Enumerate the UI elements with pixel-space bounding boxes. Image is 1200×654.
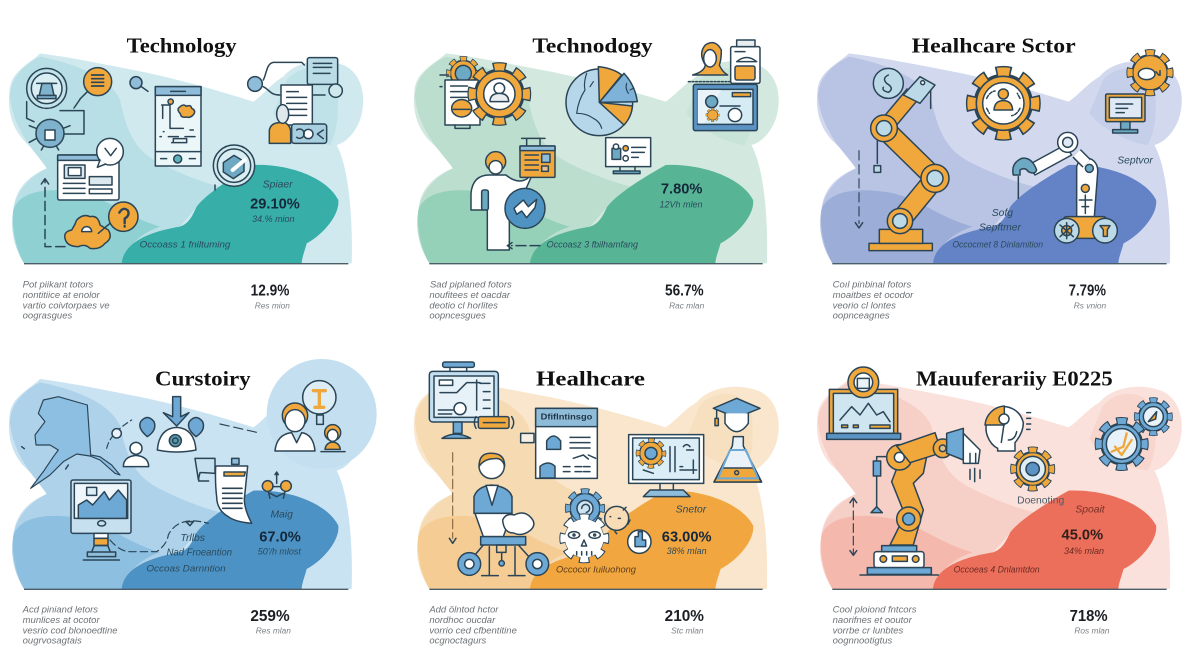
stat callout: Trllbs bbox=[180, 533, 205, 544]
body text bbox=[428, 605, 517, 646]
stat callout: Doenoting bbox=[1017, 495, 1064, 506]
body text: oopnceagnes bbox=[833, 311, 890, 322]
divider bbox=[429, 587, 763, 591]
arrow: dashed down bbox=[449, 453, 456, 543]
body text: Acd piniand letors bbox=[22, 605, 98, 616]
stat callout: Spiaer bbox=[263, 179, 293, 190]
body text: moaitbes et ocodor bbox=[833, 290, 914, 301]
bottom stat bbox=[251, 282, 290, 311]
background blobs bbox=[817, 53, 1182, 263]
icon: white robot arm bbox=[1013, 132, 1117, 243]
icon: dashed link with people bbox=[107, 420, 257, 467]
bottom stat: 12.9% bbox=[251, 282, 290, 299]
body text: vartio coivtorpaes ve bbox=[23, 300, 110, 311]
icon: magnifier bbox=[130, 77, 148, 91]
icon: businessman on wheeled chair bbox=[458, 453, 549, 576]
body text: nontitiice at enolor bbox=[23, 290, 100, 301]
stat callout: Occoeas 4 Dnlamtdon bbox=[954, 565, 1040, 575]
panel: Healhcare Sctor (indigo) bbox=[817, 33, 1182, 322]
stat callout: Spoait bbox=[1075, 504, 1106, 515]
stat callout: Occoasz 3 fbilhamfang bbox=[547, 240, 638, 250]
icon: browser window with bubble bbox=[58, 138, 123, 200]
divider bbox=[429, 262, 763, 266]
body text bbox=[22, 605, 118, 646]
bottom stat: 718% bbox=[1070, 608, 1108, 625]
stat callout: 67.0% bbox=[259, 530, 301, 546]
body text: deotio cl horlites bbox=[429, 300, 498, 311]
arrow: dashed up bbox=[41, 179, 65, 247]
stat callout: Nad Froeantion bbox=[167, 548, 232, 559]
icon: phone with circuit bbox=[155, 87, 201, 166]
icon: head profile bbox=[985, 406, 1031, 451]
icon: center gear bbox=[1014, 450, 1052, 488]
icon: robot dial bbox=[27, 68, 67, 122]
body text: vorrbe cr lunbtes bbox=[833, 625, 904, 636]
icon: person with idea bbox=[275, 381, 345, 452]
body text: vorrio ced cfbentitine bbox=[429, 625, 517, 636]
bottom stat bbox=[1069, 282, 1107, 311]
background blobs bbox=[817, 379, 1182, 589]
title: Technodogy bbox=[532, 33, 653, 57]
background blobs bbox=[9, 379, 363, 589]
icon: person gear bbox=[972, 72, 1035, 135]
icon: gears with document bbox=[440, 59, 526, 128]
body text: oograsgues bbox=[23, 311, 72, 322]
body text: ocgnoctagurs bbox=[429, 635, 487, 646]
body text bbox=[23, 280, 110, 322]
panel: Healhcare (orange) bbox=[414, 362, 779, 646]
stat callout: 63.00% bbox=[662, 529, 712, 545]
body text: vesrio cod blonoedtine bbox=[23, 625, 118, 636]
icon: large robot arm bbox=[869, 68, 949, 251]
stat callout: 12Vh mlen bbox=[660, 199, 702, 209]
background blobs bbox=[9, 53, 363, 263]
icon: woman, jar and tablet bbox=[688, 40, 760, 131]
background blobs bbox=[414, 53, 779, 263]
body text: noufitees et oacdar bbox=[429, 290, 511, 301]
bottom stat: Ros mlan bbox=[1074, 626, 1110, 636]
icon: documents and person bbox=[248, 58, 342, 143]
icon: blue gears bbox=[1099, 400, 1170, 467]
icon: graduate with flask bbox=[713, 398, 762, 482]
icon: gear and monitor bbox=[1106, 53, 1170, 133]
title: Curstoiry bbox=[155, 367, 251, 391]
body text bbox=[833, 280, 914, 322]
title: Healhcare Sctor bbox=[912, 33, 1076, 57]
icon: eye with arrows bbox=[140, 397, 203, 452]
stat callout bbox=[140, 179, 300, 249]
icon: cog skull bbox=[563, 491, 651, 559]
stat callout bbox=[556, 504, 712, 575]
stat callout: 7.80% bbox=[661, 181, 702, 197]
bottom stat bbox=[1070, 608, 1110, 636]
stat labels bbox=[952, 155, 1153, 250]
panel: Technology (teal) bbox=[9, 33, 363, 322]
stat callout: 34.% mion bbox=[252, 214, 295, 224]
icon: kiosk display bbox=[429, 362, 514, 438]
panel: Technology (green) bbox=[414, 33, 779, 322]
bottom stat bbox=[665, 608, 704, 636]
icon: orange chat bubble bbox=[74, 68, 112, 108]
icon: robot arm with nozzle bbox=[860, 428, 980, 575]
icon: computer with gear bbox=[629, 435, 704, 497]
stat callout: 45.0% bbox=[1062, 528, 1103, 544]
body text: munlices at ocotor bbox=[23, 615, 100, 626]
body text bbox=[429, 280, 512, 322]
body text: Coıl pinbinal fotors bbox=[833, 280, 911, 291]
icon: bug circle with connector bbox=[29, 111, 84, 150]
body text bbox=[833, 605, 917, 646]
arrow: dashed down bbox=[855, 151, 863, 228]
stat callout: 50'/h mlost bbox=[258, 546, 301, 556]
divider bbox=[24, 262, 348, 266]
icon: info card: Dfiflntinsgo bbox=[541, 411, 592, 421]
bottom stat: 259% bbox=[250, 608, 290, 625]
bottom stat: 7.79% bbox=[1069, 282, 1106, 299]
icon: monitor bbox=[606, 138, 651, 174]
divider bbox=[24, 587, 348, 591]
body text: naorifnes et ooutor bbox=[833, 615, 913, 626]
body text: nordhoc oucdar bbox=[429, 615, 496, 626]
icon: info card bbox=[521, 408, 597, 478]
stat callout: Occoass 1 fniltuming bbox=[140, 239, 230, 249]
title: Healhcare bbox=[536, 367, 645, 391]
body text: Add ölntod hctor bbox=[428, 605, 499, 616]
panel: Mauuferariiy E0225 (coral) bbox=[817, 367, 1182, 646]
body text: ougrvosagtais bbox=[23, 635, 82, 646]
background: person circle bbox=[267, 359, 377, 469]
stat labels: Sofg bbox=[992, 208, 1013, 219]
title: Technology bbox=[127, 33, 237, 57]
stat callout: Occocor Iuiluohong bbox=[556, 565, 636, 575]
stat callout: 38% mlan bbox=[667, 546, 707, 556]
stat callout: 29.10% bbox=[250, 196, 300, 212]
icon: network nodes bbox=[262, 472, 291, 498]
bottom stat bbox=[665, 282, 705, 311]
stat callout bbox=[954, 495, 1106, 575]
stat callout: Occoas Darnntion bbox=[146, 564, 226, 574]
icon: person with board and badge bbox=[471, 138, 555, 250]
bottom stat bbox=[250, 608, 291, 636]
body text: Pot piikant totors bbox=[23, 280, 94, 291]
bottom stat: Stc mlan bbox=[671, 626, 704, 636]
body text: veorio cl lontes bbox=[833, 300, 896, 311]
bottom stat: Rs vnion bbox=[1074, 301, 1107, 311]
background blobs bbox=[414, 379, 779, 589]
stat callout: Maig bbox=[270, 509, 293, 520]
stat labels: Sepftmer bbox=[979, 223, 1022, 234]
stat callout bbox=[547, 181, 702, 250]
bottom stat: 210% bbox=[665, 608, 704, 625]
stat labels: Septvor bbox=[1117, 155, 1153, 166]
chart: pie globe bbox=[566, 67, 637, 136]
body text: oopncesgues bbox=[429, 311, 486, 322]
icon: scroll document bbox=[195, 458, 252, 523]
bottom stat: Res mlan bbox=[256, 626, 291, 636]
icon: Alaska map bbox=[22, 397, 120, 488]
icon: desktop with chart bbox=[71, 480, 131, 560]
body text: Sad piplaned fotors bbox=[430, 280, 512, 291]
stat callout: 34% mlan bbox=[1064, 546, 1104, 556]
panel: Curstoiry (blue) bbox=[9, 359, 377, 646]
stat callout bbox=[146, 509, 301, 574]
arrow: dashed left bbox=[507, 243, 540, 249]
title: Mauuferariiy E0225 bbox=[916, 367, 1113, 391]
bottom stat: Res mion bbox=[255, 301, 290, 311]
arrow: dashed curve bbox=[110, 521, 208, 552]
stat labels: Occocmet 8 Dinlamition bbox=[952, 240, 1043, 250]
stat callout: Snetor bbox=[676, 504, 707, 515]
body text: oognnootigtus bbox=[833, 635, 893, 646]
divider bbox=[832, 587, 1167, 591]
icon: orange puzzle and question bubble bbox=[65, 202, 138, 249]
bottom stat: 56.7% bbox=[665, 282, 704, 299]
icon: framed mountains bbox=[827, 367, 901, 439]
divider bbox=[832, 262, 1167, 266]
bottom stat: Rac mlan bbox=[669, 301, 705, 311]
body text: Cool ploiond fntcors bbox=[833, 605, 917, 616]
arrow: double dashed bbox=[850, 498, 857, 555]
icon: check badge bbox=[213, 145, 255, 190]
